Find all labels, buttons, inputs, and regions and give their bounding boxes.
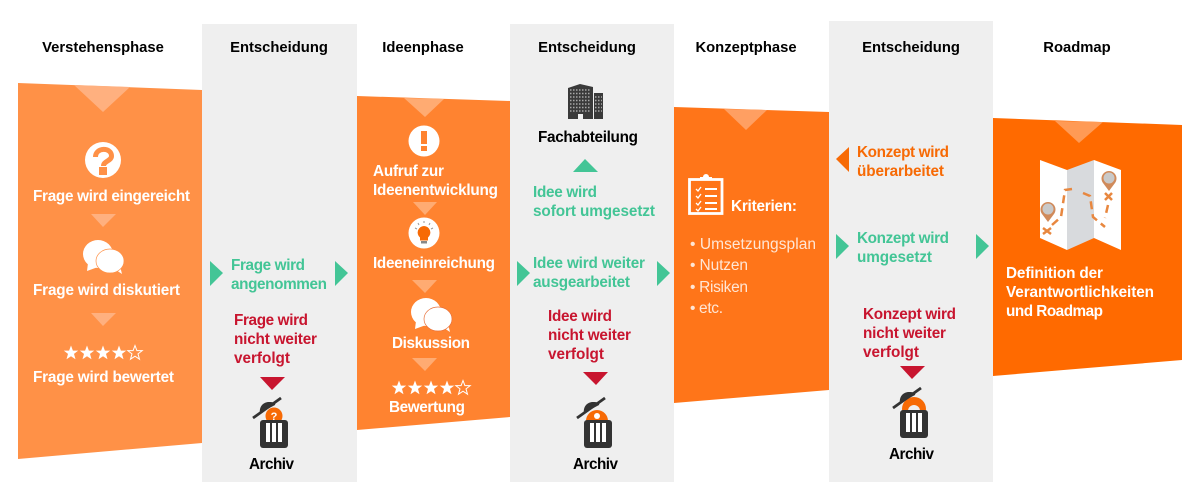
arrow: out bbox=[335, 261, 348, 286]
arrow: to archive bbox=[260, 377, 285, 390]
panel: Entscheidung 2 content bbox=[517, 84, 670, 473]
icon: archive bin: ? bbox=[271, 411, 278, 423]
icon: archive bin bbox=[577, 398, 612, 448]
text: Frage wird eingereicht: Frage wird eingereicht bbox=[33, 188, 190, 205]
text: Konzept wird nicht weiter verfolgt: nicht weiter bbox=[863, 325, 946, 342]
text: Frage wird angenommen: angenommen bbox=[231, 276, 327, 293]
panel: Ideenphase bbox=[357, 96, 510, 430]
list: criteria: • Risiken bbox=[690, 279, 748, 296]
icon: question mark bbox=[85, 142, 121, 178]
text: Archiv: Archiv bbox=[889, 446, 934, 463]
panel: Entscheidung 2 background bbox=[510, 24, 674, 482]
arrow: panel top bbox=[724, 109, 767, 130]
text: Definition der Verantwortlichkeiten und Roadmap: Verantwortlichkeiten bbox=[1006, 284, 1154, 301]
list: criteria: • Nutzen bbox=[690, 257, 748, 274]
heading: Roadmap: Roadmap bbox=[1043, 40, 1111, 56]
arrow: step 2 bbox=[412, 280, 437, 293]
arrow: to archive bbox=[583, 372, 608, 385]
icon: archive bin bbox=[253, 398, 288, 448]
arrow: out bbox=[657, 261, 670, 286]
heading: Ideenphase: Ideenphase bbox=[382, 40, 464, 56]
panel: Entscheidung 3 content bbox=[836, 144, 989, 463]
text: Idee wird weiter ausgearbeitet: Idee wird weiter bbox=[533, 255, 645, 272]
panel: Entscheidung 1 content bbox=[210, 257, 348, 473]
heading: Entscheidung 3: Entscheidung bbox=[862, 40, 960, 56]
text: Archiv: Archiv bbox=[573, 456, 618, 473]
icon: map bbox=[1040, 160, 1121, 250]
arrow: to archive bbox=[900, 366, 925, 379]
arrow: in bbox=[836, 234, 849, 259]
list: criteria: • Umsetzungsplan bbox=[690, 236, 816, 253]
icon: clipboard bbox=[690, 174, 722, 214]
icon: archive bin bbox=[893, 388, 928, 438]
arrow: in bbox=[517, 261, 530, 286]
text: Konzept wird nicht weiter verfolgt: Konzept wird bbox=[863, 306, 956, 323]
text: Idee wird nicht weiter verfolgt: Idee wird bbox=[548, 308, 612, 325]
icon: exclamation bbox=[408, 126, 440, 156]
text: Kriterien: Kriterien: bbox=[731, 198, 797, 215]
text: Frage wird bewertet: Frage wird bewertet bbox=[33, 369, 174, 386]
text: Diskussion: Diskussion bbox=[392, 335, 470, 352]
text: Konzept wird nicht weiter verfolgt: verfolgt bbox=[863, 344, 919, 361]
arrow: in bbox=[210, 261, 223, 286]
icon: rating stars bbox=[392, 380, 470, 394]
text: Idee wird nicht weiter verfolgt: verfolgt bbox=[548, 346, 604, 363]
arrow: step 1 bbox=[91, 214, 116, 227]
text: Frage wird angenommen: Frage wird bbox=[231, 257, 305, 274]
text: Frage wird diskutiert: Frage wird diskutiert bbox=[33, 282, 180, 299]
icon: light bulb bbox=[408, 218, 440, 248]
arrow: step 1 bbox=[413, 202, 437, 215]
panel: Roadmap bbox=[993, 118, 1182, 376]
text: Archiv: Archiv bbox=[249, 456, 294, 473]
text: Konzept wird überarbeitet: überarbeitet bbox=[857, 163, 944, 180]
text: Idee wird sofort umgesetzt: sofort umgesetzt bbox=[533, 203, 655, 220]
icon: office building bbox=[568, 84, 603, 119]
arrow: panel top bbox=[74, 85, 130, 112]
text: Definition der Verantwortlichkeiten und Roadmap: Definition der bbox=[1006, 265, 1103, 282]
text: Idee wird nicht weiter verfolgt: nicht weiter bbox=[548, 327, 631, 344]
panel: Verstehensphase bbox=[18, 83, 202, 459]
text: Fachabteilung: Fachabteilung bbox=[538, 129, 638, 146]
arrow: panel top bbox=[404, 98, 444, 117]
text: Konzept wird überarbeitet: Konzept wird bbox=[857, 144, 949, 161]
heading: Konzeptphase: Konzeptphase bbox=[695, 40, 797, 56]
list: criteria: • etc. bbox=[690, 300, 723, 317]
arrow: back bbox=[836, 147, 849, 172]
panel: Entscheidung 3 background bbox=[829, 21, 993, 482]
text: Konzept wird umgesetzt: umgesetzt bbox=[857, 249, 932, 266]
text: Idee wird weiter ausgearbeitet: ausgearbeitet bbox=[533, 274, 630, 291]
heading: Verstehensphase: Verstehensphase bbox=[42, 40, 164, 56]
arrow: step 2 bbox=[91, 313, 116, 326]
panel: Entscheidung 1 background bbox=[202, 24, 357, 482]
panel: Konzeptphase bbox=[674, 107, 829, 403]
arrow: up bbox=[573, 159, 598, 172]
icon: discussion bubbles bbox=[411, 298, 452, 332]
icon: discussion bubbles bbox=[83, 240, 124, 274]
icon: rating stars bbox=[64, 346, 142, 359]
arrow: out bbox=[976, 234, 989, 259]
text: Idee wird sofort umgesetzt: Idee wird bbox=[533, 184, 597, 201]
text: Bewertung: Bewertung bbox=[389, 399, 465, 416]
arrow: step 3 bbox=[412, 358, 437, 371]
text: Konzept wird umgesetzt: Konzept wird bbox=[857, 230, 949, 247]
text: Frage wird nicht weiter verfolgt: Frage wird bbox=[234, 312, 308, 329]
text: Frage wird nicht weiter verfolgt: nicht weiter bbox=[234, 331, 317, 348]
text: Aufruf zur Ideenentwicklung: Ideenentwicklung bbox=[373, 182, 498, 199]
text: Aufruf zur Ideenentwicklung: Aufruf zur bbox=[373, 163, 444, 180]
text: Definition der Verantwortlichkeiten und Roadmap: und Roadmap bbox=[1006, 303, 1103, 320]
heading: Entscheidung 1: Entscheidung bbox=[230, 40, 328, 56]
text: Frage wird nicht weiter verfolgt: verfolgt bbox=[234, 350, 290, 367]
text: Ideeneinreichung: Ideeneinreichung bbox=[373, 255, 495, 272]
arrow: panel top bbox=[1055, 121, 1103, 143]
heading: Entscheidung 2: Entscheidung bbox=[538, 40, 636, 56]
